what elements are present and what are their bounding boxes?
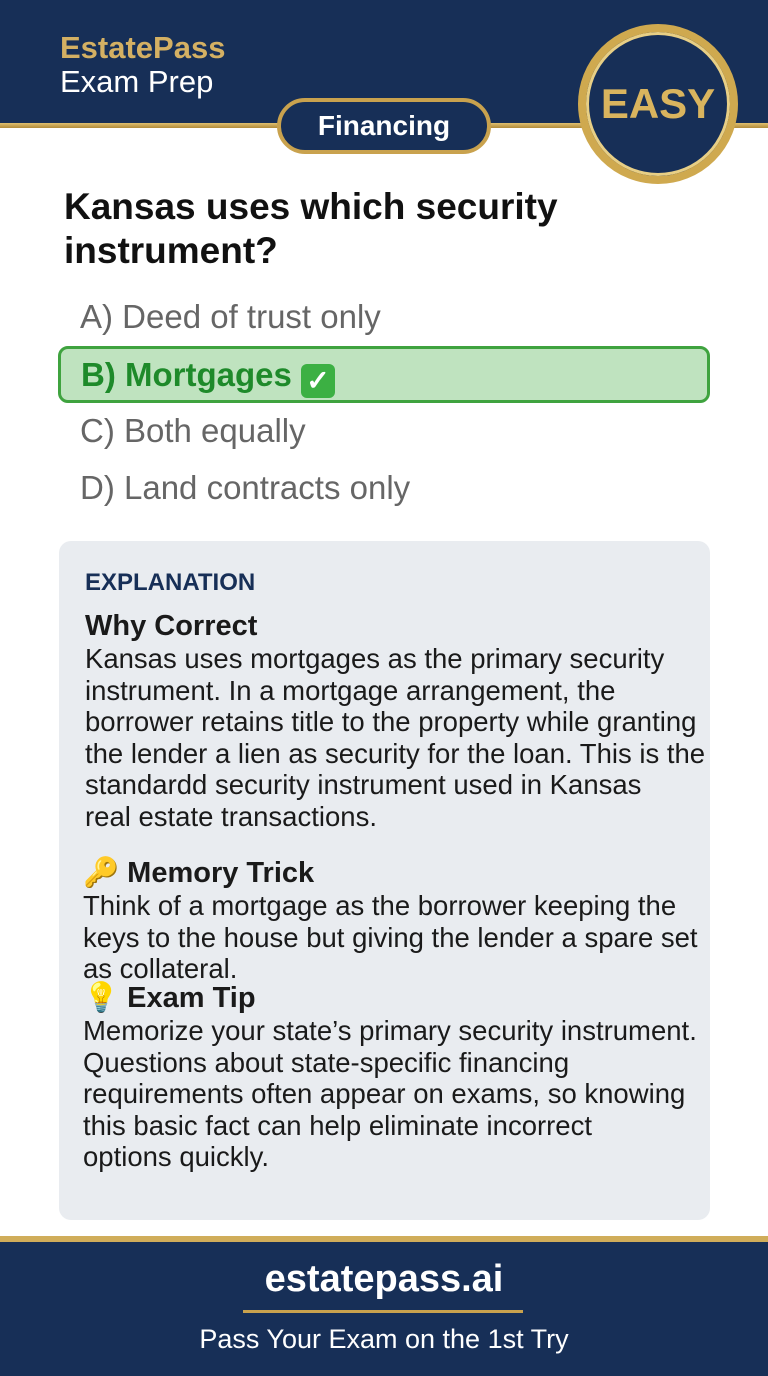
exam tip: Questions about state-specific financing	[83, 1047, 569, 1078]
exam tip: options quickly.	[83, 1141, 269, 1172]
header band	[0, 0, 768, 125]
brand logo text: EstatePass	[60, 30, 225, 65]
why correct: Why Correct	[85, 610, 257, 642]
question: Kansas uses which security	[64, 186, 558, 227]
explanation panel	[59, 541, 710, 1220]
memory trick	[83, 856, 698, 984]
memory trick: keys to the house but giving the lender a spare set	[83, 922, 698, 953]
why correct: standardd security instrument used in Kansas	[85, 769, 641, 800]
explanation heading: EXPLANATION	[85, 569, 255, 596]
memory trick: Think of a mortgage as the borrower keeping the	[83, 890, 676, 921]
why correct: borrower retains title to the property while granting	[85, 706, 696, 737]
category pill	[277, 98, 491, 154]
why correct	[85, 610, 705, 832]
footer url: estatepass.ai	[265, 1258, 503, 1300]
category pill: Financing	[318, 110, 450, 141]
option C: C) Both equally	[80, 412, 306, 449]
difficulty badge	[578, 24, 738, 184]
exam tip: requirements often appear on exams, so knowing	[83, 1078, 685, 1109]
option B correct	[58, 346, 710, 403]
exam tip	[83, 981, 697, 1172]
why correct: Kansas uses mortgages as the primary security	[85, 643, 664, 674]
memory trick: as collateral.	[83, 953, 237, 984]
exam tip: 💡 Exam Tip	[83, 982, 256, 1014]
option B correct: ✓	[306, 365, 330, 396]
why correct: the lender a lien as security for the loan. This is the	[85, 738, 705, 769]
exam tip: Memorize your state’s primary security instrument.	[83, 1015, 697, 1046]
memory trick: 🔑 Memory Trick	[83, 857, 314, 889]
brand logo text	[60, 30, 225, 99]
answer options	[58, 298, 710, 506]
exam tip: this basic fact can help eliminate incorrect	[83, 1110, 592, 1141]
option A: A) Deed of trust only	[80, 298, 381, 335]
question	[64, 186, 558, 271]
brand logo text: Exam Prep	[60, 64, 213, 99]
difficulty badge: EASY	[601, 80, 715, 127]
option D: D) Land contracts only	[80, 469, 410, 506]
option B correct: B) Mortgages	[81, 356, 292, 393]
question: instrument?	[64, 230, 278, 271]
footer band	[0, 1236, 768, 1376]
footer tagline: Pass Your Exam on the 1st Try	[199, 1324, 569, 1354]
why correct: real estate transactions.	[85, 801, 377, 832]
why correct: instrument. In a mortgage arrangement, the	[85, 675, 615, 706]
